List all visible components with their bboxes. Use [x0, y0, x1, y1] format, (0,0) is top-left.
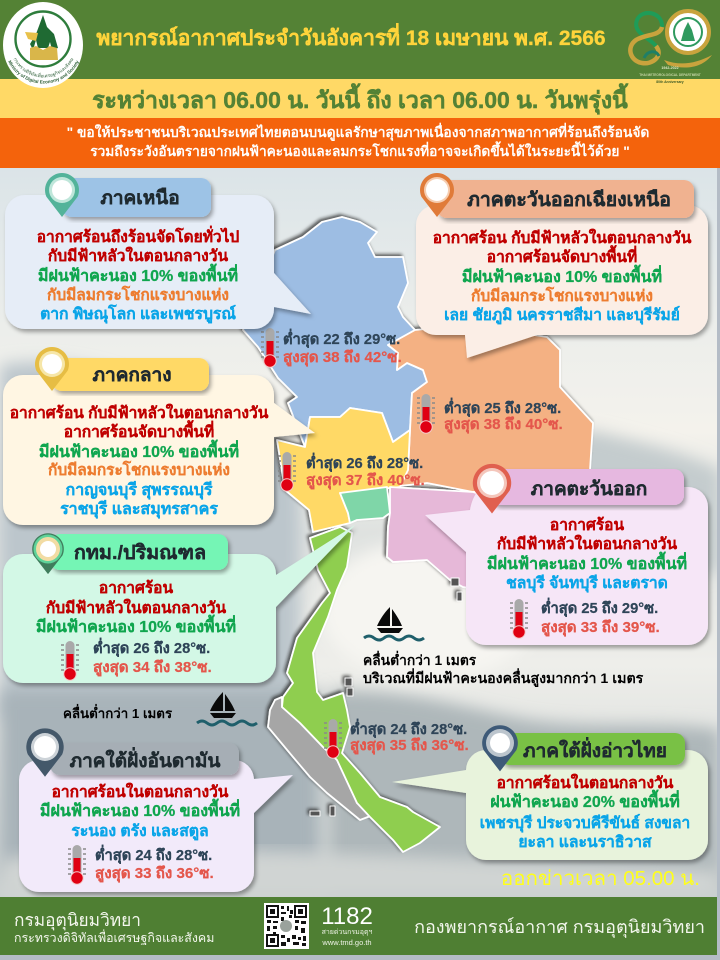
- forecast text: อากาศร้อนจัดบางพื้นที่: [64, 420, 214, 441]
- forecast text: [36, 579, 236, 636]
- forecast text: ตาก พิษณุโลก และเพชรบูรณ์: [40, 304, 236, 325]
- forecast text: อากาศร้อน กับมีฟ้าหลัวในตอนกลางวัน: [10, 403, 269, 422]
- panel: south Gulf coast: [392, 725, 708, 860]
- heading: ภาคกลาง: [92, 365, 172, 386]
- forecast text: อากาศร้อน กับมีฟ้าหลัวในตอนกลางวัน: [433, 228, 692, 247]
- title: พยากรณ์อากาศประจำวันอังคารที่ 18 เมษายน พ.ศ. 2566: [96, 22, 606, 50]
- temperature values: [95, 844, 214, 883]
- logo: 80th anniversary: 80th Anniversary: [656, 80, 684, 84]
- heading bar: [490, 469, 684, 505]
- temperature values: สูงสุด 35 ถึง 36°ซ.: [350, 736, 469, 755]
- temperature values: สูงสุด 33 ถึง 36°ซ.: [95, 864, 214, 883]
- wave text: คลื่นต่ำกว่า 1 เมตร: [363, 650, 477, 668]
- temperature values: สูงสุด 34 ถึง 38°ซ.: [93, 658, 212, 677]
- icon: thermometer: [61, 641, 79, 680]
- heading: ภาคตะวันออก: [531, 479, 647, 500]
- sea conditions: east: [363, 607, 644, 687]
- forecast text: กับมีฟ้าหลัวในตอนกลางวัน: [497, 534, 677, 553]
- forecast text: มีฝนฟ้าคะนอง 10% ของพื้นที่: [39, 439, 239, 461]
- department name: [14, 910, 214, 945]
- temperature: south: [324, 718, 469, 758]
- background: misty mountains: [0, 168, 720, 900]
- forecast text: ฝนฟ้าคะนอง 20% ของพื้นที่: [490, 789, 680, 811]
- advisory band: [0, 118, 720, 168]
- icon: thermometer: [261, 328, 279, 367]
- logo: Ministry emblem: [3, 2, 83, 88]
- temperature values: ต่ำสุด 22 ถึง 29°ซ.: [283, 328, 400, 348]
- icon: boat: [197, 692, 257, 725]
- temperature values: สูงสุด 33 ถึง 39°ซ.: [541, 618, 660, 637]
- temperature values: สูงสุด 38 ถึง 42°ซ.: [283, 348, 402, 367]
- forecast text: มีฝนฟ้าคะนอง 10% ของพื้นที่: [38, 263, 238, 285]
- icon: map pin: [35, 347, 69, 391]
- temperature: north: [261, 328, 402, 367]
- callout bubble: [3, 375, 315, 525]
- region: northeast: [388, 325, 593, 492]
- footer band: [0, 897, 720, 955]
- temperature values: ต่ำสุด 24 ถึง 28°ซ.: [350, 718, 467, 738]
- heading bar: [500, 733, 685, 765]
- forecast text: มีฝนฟ้าคะนอง 10% ของพื้นที่: [40, 798, 240, 820]
- wave text: คลื่นต่ำกว่า 1 เมตร: [63, 703, 173, 721]
- map of Thailand: [243, 217, 593, 852]
- callout bubble: [5, 195, 311, 329]
- logo: 80th anniversary: [630, 9, 712, 84]
- department name: กรมอุตุนิยมวิทยา: [14, 910, 141, 931]
- forecast text: [433, 228, 692, 326]
- forecast text: [37, 225, 239, 325]
- panel: north: [5, 173, 311, 329]
- forecast text: กับมีฟ้าหลัวในตอนกลางวัน: [48, 246, 228, 265]
- forecast text: [10, 403, 269, 519]
- temperature values: [350, 718, 469, 755]
- sea conditions: west: [63, 692, 257, 725]
- islands: [310, 578, 462, 816]
- region: Bangkok and vicinity: [340, 487, 390, 523]
- heading: ภาคตะวันออกเฉียงเหนือ: [467, 189, 671, 211]
- forecast text: กับมีฟ้าหลัวในตอนกลางวัน: [46, 598, 226, 617]
- panel: south Andaman coast: [19, 728, 293, 892]
- forecast text: กับมีลมกระโชกแรงบางแห่ง: [471, 286, 653, 305]
- heading bar: [50, 743, 239, 775]
- panel: central: [3, 347, 315, 525]
- icon: map pin: [45, 173, 79, 217]
- forecast text: ราชบุรี และสมุทรสาคร: [60, 499, 218, 519]
- temperature values: [541, 597, 660, 637]
- hotline: [321, 903, 373, 947]
- heading: ภาคเหนือ: [100, 187, 180, 209]
- logo: Ministry emblem: กระทรวงดิจิทัลเพื่อเศรษฐกิจและสังคม: [14, 58, 74, 78]
- forecast text: อากาศร้อนจัดบางพื้นที่: [487, 245, 637, 266]
- icon: map pin: [482, 725, 518, 771]
- icon: map pin: [473, 464, 511, 514]
- icon: thermometer: [417, 394, 435, 433]
- callout bubble: [19, 760, 293, 892]
- logo: 80th anniversary: THAI METEOROLOGICAL DEPARTMENT: [639, 73, 701, 77]
- temperature values: [93, 637, 212, 677]
- forecast text: อากาศร้อน: [550, 516, 624, 534]
- region: central: [277, 408, 410, 532]
- advisory text: รวมถึงระวังอันตรายจากฝนฟ้าคะนองและลมกระโชกแรงที่อาจจะเกิดขึ้นได้ในระยะนี้ไว้ด้วย ": [90, 141, 630, 159]
- forecast text: อากาศร้อน: [99, 579, 173, 597]
- temperature: central: [278, 452, 425, 491]
- forecast text: กับมีลมกระโชกแรงบางแห่ง: [48, 460, 230, 479]
- callout bubble: [392, 750, 708, 860]
- icon: thermometer: [510, 599, 528, 638]
- region: south Andaman coast: [268, 697, 373, 820]
- advisory text: [67, 122, 649, 159]
- division name: กองพยากรณ์อากาศ กรมอุตุนิยมวิทยา: [414, 917, 705, 938]
- forecast text: เลย ชัยภูมิ นครราชสีมา และบุรีรัมย์: [444, 306, 680, 326]
- forecast text: มีฝนฟ้าคะนอง 10% ของพื้นที่: [487, 551, 687, 573]
- forecast text: [487, 516, 687, 593]
- temperature values: ต่ำสุด 25 ถึง 28°ซ.: [444, 397, 561, 417]
- temperature values: ต่ำสุด 26 ถึง 28°ซ.: [93, 637, 210, 657]
- forecast text: กาญจนบุรี สุพรรณบุรี: [66, 480, 213, 500]
- heading bar: [50, 534, 228, 570]
- header band: [0, 0, 720, 79]
- forecast text: ชลบุรี จันทบุรี และตราด: [506, 573, 668, 593]
- icon: map pin: [26, 728, 64, 777]
- panel: east: [425, 464, 708, 645]
- hotline: www.tmd.go.th: [321, 938, 372, 947]
- region: north: [243, 217, 427, 447]
- temperature values: สูงสุด 38 ถึง 40°ซ.: [444, 415, 563, 434]
- callout bubble: [3, 525, 355, 683]
- temperature values: ต่ำสุด 26 ถึง 28°ซ.: [306, 452, 423, 472]
- icon: map pin: [420, 173, 454, 217]
- logo: 80th anniversary: 1942-2022: [661, 66, 679, 70]
- hotline: 1182: [321, 903, 373, 930]
- forecast text: อากาศร้อนถึงร้อนจัดโดยทั่วไป: [37, 225, 239, 246]
- logo: Ministry emblem: Ministry of Digital Economy and Society: [8, 60, 79, 84]
- temperature values: ต่ำสุด 25 ถึง 29°ซ.: [541, 597, 658, 617]
- temperature: northeast: [417, 394, 563, 434]
- temperature values: ต่ำสุด 24 ถึง 28°ซ.: [95, 844, 212, 864]
- wave text: บริเวณที่มีฝนฟ้าคะนองคลื่นสูงมากกว่า 1 เมตร: [363, 667, 644, 687]
- wave text: [363, 650, 644, 687]
- heading bar: [437, 180, 694, 218]
- heading: ภาคใต้ฝั่งอันดามัน: [70, 747, 220, 772]
- icon: map pin: [32, 533, 64, 574]
- subtitle: ระหว่างเวลา 06.00 น. วันนี้ ถึง เวลา 06.00 น. วันพรุ่งนี้: [92, 83, 629, 115]
- time band: [0, 79, 720, 118]
- callout bubble: [425, 487, 708, 645]
- heading bar: [62, 178, 211, 217]
- forecast text: ระนอง ตรัง และสตูล: [71, 822, 209, 842]
- forecast text: กับมีลมกระโชกแรงบางแห่ง: [47, 285, 229, 304]
- temperature values: สูงสุด 37 ถึง 40°ซ.: [306, 471, 425, 490]
- icon: thermometer: [68, 845, 86, 884]
- QR code: [264, 903, 309, 949]
- icon: thermometer: [278, 452, 296, 491]
- forecast text: มีฝนฟ้าคะนอง 10% ของพื้นที่: [462, 264, 662, 286]
- region: east: [387, 487, 500, 590]
- forecast text: [40, 782, 240, 842]
- heading bar: [52, 358, 209, 391]
- panel: northeast: [416, 173, 708, 358]
- heading: กทม./ปริมณฑล: [74, 542, 206, 564]
- forecast text: อากาศร้อนในตอนกลางวัน: [497, 773, 674, 792]
- panel: Bangkok and vicinity: [3, 525, 355, 683]
- forecast text: มีฝนฟ้าคะนอง 10% ของพื้นที่: [36, 614, 236, 636]
- heading: ภาคใต้ฝั่งอ่าวไทย: [523, 737, 667, 762]
- callout bubble: [416, 205, 708, 358]
- advisory text: " ขอให้ประชาชนบริเวณประเทศไทยตอนบนดูแลรักษาสุขภาพเนื่องจากสภาพอากาศที่ร้อนถึงร้อนจัด: [67, 122, 649, 141]
- department name: กระทรวงดิจิทัลเพื่อเศรษฐกิจและสังคม: [14, 929, 214, 945]
- temperature values: [444, 397, 563, 434]
- temperature values: [306, 452, 425, 490]
- forecast text: เพชรบุรี ประจวบคีรีขันธ์ สงขลา: [480, 814, 690, 833]
- temperature values: [283, 328, 402, 367]
- forecast text: ยะลา และนราธิวาส: [518, 833, 652, 851]
- release time: ออกข่าวเวลา 05.00 น.: [501, 867, 700, 890]
- forecast text: อากาศร้อนในตอนกลางวัน: [52, 782, 229, 801]
- icon: thermometer: [324, 719, 342, 758]
- icon: boat: [364, 607, 424, 640]
- hotline: สายด่วนกรมอุตุฯ: [322, 929, 372, 936]
- forecast text: [480, 773, 690, 851]
- region: south Gulf coast: [282, 527, 440, 852]
